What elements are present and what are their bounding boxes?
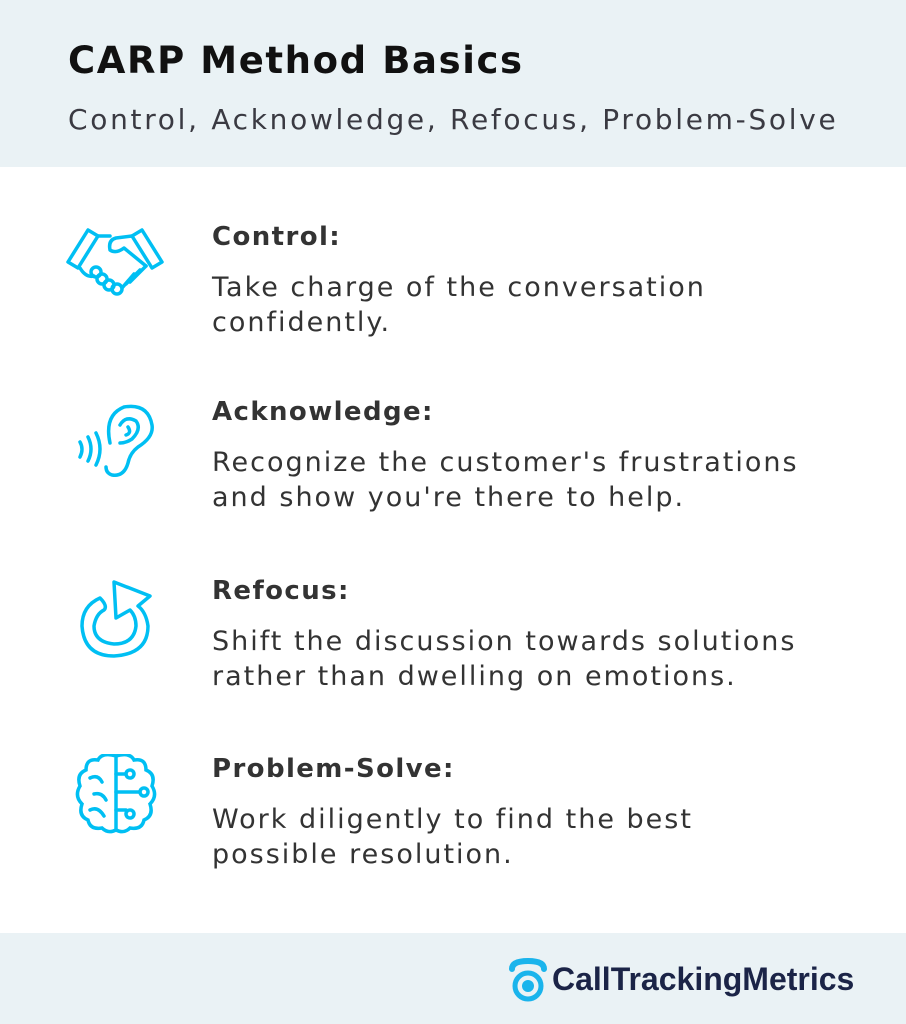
subtitle: Control, Acknowledge, Refocus, Problem-Solve: [68, 103, 838, 136]
body text: and show you're there to help.: [212, 482, 685, 513]
body text: [212, 447, 799, 513]
body text: [212, 804, 693, 870]
heading: Problem-Solve:: [212, 754, 455, 784]
logo text: CallTrackingMetrics: [552, 961, 854, 997]
icon: brain: [76, 754, 156, 834]
item: control: [66, 222, 706, 338]
body text: Take charge of the conversation: [212, 272, 706, 303]
icon: handshake: [66, 228, 164, 296]
body text: Recognize the customer's frustrations: [212, 447, 799, 478]
body text: confidently.: [212, 307, 391, 338]
heading: Control:: [212, 222, 341, 252]
icon: ear: [78, 404, 154, 477]
title: CARP Method Basics: [68, 39, 524, 82]
icon: circular arrow: [80, 580, 152, 658]
header band: [0, 0, 906, 167]
body text: rather than dwelling on emotions.: [212, 661, 737, 692]
item: problem-solve: [76, 754, 693, 870]
heading: Refocus:: [212, 576, 350, 606]
body text: Work diligently to find the best: [212, 804, 693, 835]
item: acknowledge: [78, 397, 799, 513]
icon: phone logo: [509, 958, 547, 1002]
heading: Acknowledge:: [212, 397, 434, 427]
body text: [212, 626, 796, 692]
footer band: [0, 933, 906, 1024]
body text: Shift the discussion towards solutions: [212, 626, 796, 657]
logo: [509, 958, 854, 1002]
body text: [212, 272, 706, 338]
item: refocus: [80, 576, 796, 692]
body text: possible resolution.: [212, 839, 514, 870]
